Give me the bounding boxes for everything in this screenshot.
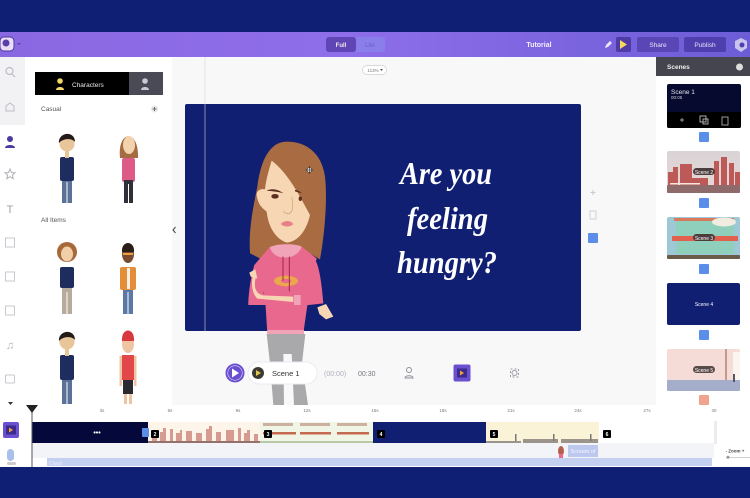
button: add after scene 1 xyxy=(699,132,709,142)
icon: text: T xyxy=(7,204,14,216)
canvas side tools xyxy=(588,190,598,243)
brows and eyes xyxy=(267,189,302,201)
thumbnail: scene 3: Scene 3 xyxy=(695,236,713,242)
thumbnail: scene 4: Scene 4 xyxy=(695,302,713,308)
nose xyxy=(283,197,293,214)
guide line xyxy=(204,57,206,332)
icon: image xyxy=(6,238,14,247)
zoom percentage pill: 113% xyxy=(367,68,379,73)
character: main woman xyxy=(248,142,333,405)
hood xyxy=(270,244,302,257)
clip: scene 4 xyxy=(373,422,486,443)
thumbnail: scene 2 xyxy=(667,151,740,193)
icon: music: ♫ xyxy=(6,340,14,352)
badges: scene numbers: 3 xyxy=(267,432,270,438)
toggle: Full / Lite: Lite xyxy=(365,43,375,49)
cuff xyxy=(294,295,301,305)
character: man dark hair xyxy=(59,134,75,204)
pill: scene 1: Scene 1 xyxy=(272,369,300,378)
ruler labels: 24s xyxy=(574,408,582,413)
zoom percentage pill xyxy=(362,66,386,74)
drawstrings xyxy=(283,257,289,291)
clip: voice label: Scream of xyxy=(570,449,596,455)
mouth xyxy=(281,221,293,226)
scenes header: Scenes xyxy=(667,64,690,71)
panel: character library xyxy=(25,57,172,405)
button: add after scene 2 xyxy=(699,198,709,208)
thumbnail: scene 3 xyxy=(667,217,740,259)
character: man curly hair xyxy=(57,242,77,314)
track row: music xyxy=(47,458,712,466)
zoom control xyxy=(726,448,750,459)
canvas: scene 1 xyxy=(185,104,581,331)
icon: collapse arrow xyxy=(173,227,176,233)
timeline xyxy=(0,405,750,467)
badges: scene numbers xyxy=(151,430,611,438)
icon: video xyxy=(6,375,14,383)
thumbnail: scene 1 xyxy=(667,84,741,128)
character: woman pink hoodie xyxy=(120,136,138,204)
button: add after scene 4 xyxy=(699,330,709,340)
handle: scene 1 end xyxy=(142,428,149,437)
clip: scene 2 xyxy=(148,422,260,443)
tab: characters: Characters xyxy=(72,82,105,89)
legs xyxy=(267,334,308,405)
button: publish: Publish xyxy=(694,42,716,49)
clip: scene 1 xyxy=(32,422,148,443)
heading: casual: Casual xyxy=(41,106,62,113)
crossed arm xyxy=(248,265,296,305)
badges: scene numbers: 5 xyxy=(493,432,496,438)
icon: home xyxy=(6,103,14,111)
icon: add casual xyxy=(151,106,158,112)
tab: characters xyxy=(35,72,163,95)
clip: voice label xyxy=(568,445,598,457)
torso xyxy=(254,247,317,333)
button: share: Share xyxy=(649,42,667,49)
ruler labels: 21s xyxy=(507,408,515,413)
thumbnail: scene 4 xyxy=(667,283,740,325)
thumbnail: scene 5: Scene 5 xyxy=(695,368,713,374)
icon: fit target xyxy=(510,369,518,377)
thumbnail: scene 2: Scene 2 xyxy=(695,170,713,176)
thumbnail: scene 5 xyxy=(667,349,740,391)
playhead xyxy=(26,405,38,467)
ruler labels: 30 xyxy=(711,408,717,413)
icon: expand arrow xyxy=(8,402,13,405)
ruler labels: 15s xyxy=(371,408,379,413)
ruler labels: 3s xyxy=(100,408,105,413)
heading: all items: All Items xyxy=(41,217,67,224)
headline: hungry? xyxy=(397,244,497,280)
icon: pencil xyxy=(605,41,612,48)
character: man red cap xyxy=(120,330,136,404)
face xyxy=(257,161,310,243)
far arm xyxy=(298,258,323,306)
ruler labels: 18s xyxy=(439,408,447,413)
icon: add xyxy=(590,190,596,195)
icon: app logo xyxy=(0,37,21,51)
pill: scene 1 xyxy=(248,362,317,384)
icon: microphone xyxy=(7,449,16,465)
thumbnail: scene 1: Scene 1 xyxy=(671,89,695,96)
button: record xyxy=(454,364,470,382)
time total: 00:30 xyxy=(358,371,376,378)
headline: feeling xyxy=(407,200,488,236)
badges: scene numbers: 4 xyxy=(380,432,383,438)
music label: Cloud xyxy=(49,461,62,467)
ruler labels: 6s xyxy=(168,408,173,413)
ruler labels: 9s xyxy=(236,408,241,413)
toggle: Full / Lite xyxy=(326,37,385,52)
character: man dark hair two xyxy=(59,332,75,404)
track row: voice xyxy=(32,443,714,458)
ruler labels: 12s xyxy=(303,408,311,413)
button: share xyxy=(637,37,679,52)
ruler labels: 27s xyxy=(643,408,651,413)
time current: (00:00) xyxy=(324,371,346,378)
panel: scenes xyxy=(656,57,750,405)
left icon rail xyxy=(0,57,25,405)
scenes header xyxy=(656,57,750,76)
button: blue square xyxy=(588,233,598,243)
icon: move cursor xyxy=(305,166,313,174)
character: man orange jacket xyxy=(120,243,136,314)
clip: scene 5 xyxy=(486,422,599,443)
character clip icon xyxy=(558,446,564,458)
clip: scene 1: ••• xyxy=(93,430,101,437)
icon: character voice xyxy=(405,368,413,378)
hoodie logo xyxy=(274,276,298,286)
button: publish xyxy=(684,37,726,52)
top toolbar xyxy=(0,32,750,57)
forearm xyxy=(252,274,293,302)
button: play all xyxy=(226,364,244,382)
project title: Tutorial xyxy=(526,42,552,49)
timeline end bar xyxy=(714,421,717,444)
icon: media xyxy=(6,272,14,281)
icon: characters active xyxy=(5,136,15,148)
button: preview play xyxy=(616,37,631,52)
thumbnail: scene 1: 00:05 xyxy=(671,95,683,100)
headline xyxy=(397,155,497,280)
button: add after scene 3 xyxy=(699,264,709,274)
button: add after scene 5 xyxy=(699,395,709,405)
playback controls xyxy=(226,362,518,384)
icon: help avatar xyxy=(735,38,747,52)
hands xyxy=(249,269,333,319)
zoom control: - Zoom + xyxy=(726,448,745,454)
clip: scene 3 xyxy=(260,422,373,443)
icon: search xyxy=(6,68,15,77)
icon: trash xyxy=(590,211,596,219)
toggle: Full / Lite: Full xyxy=(336,43,347,49)
icon: star xyxy=(5,169,15,179)
hem xyxy=(267,330,304,334)
icon: chart xyxy=(6,306,14,315)
button: video track xyxy=(3,422,19,438)
ruler labels xyxy=(100,408,717,413)
badges: scene numbers: 6 xyxy=(606,432,609,438)
hair xyxy=(250,142,326,259)
badges: scene numbers: 2 xyxy=(154,432,157,438)
headline: Are you xyxy=(398,155,492,191)
